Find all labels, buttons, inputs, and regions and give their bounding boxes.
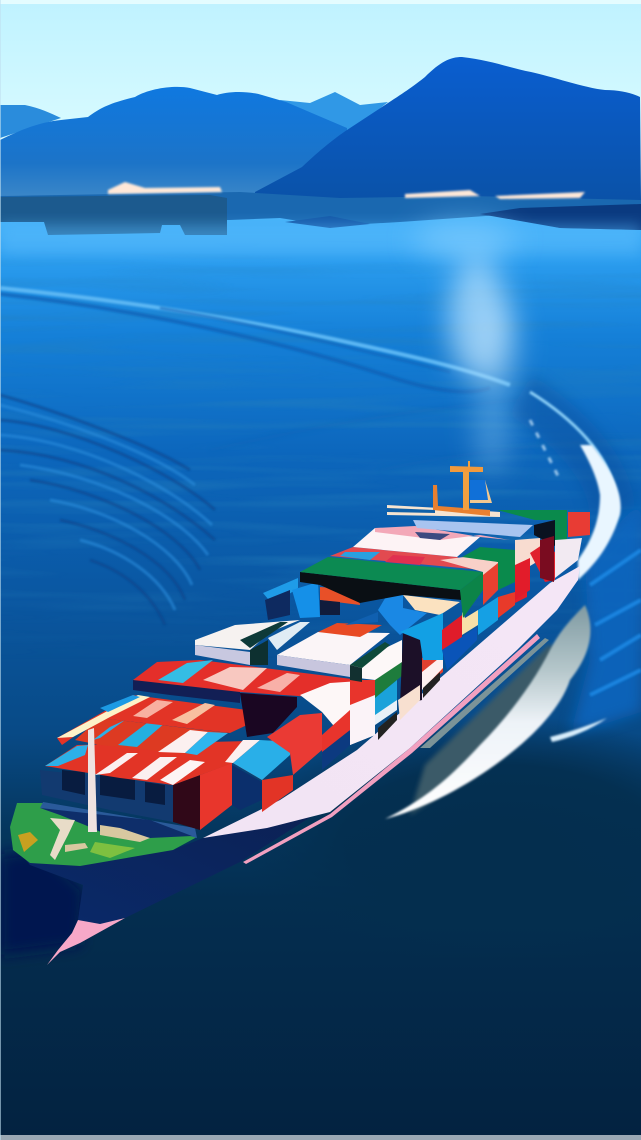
mountains: [0, 57, 641, 200]
mid-stack side containers: [322, 627, 443, 770]
brighter water along the right edge: [570, 500, 641, 735]
row A upper layer: [75, 718, 228, 755]
stern wake foam: [385, 445, 621, 819]
smoke plume: [415, 220, 518, 475]
red block right: [267, 713, 322, 775]
row C dark front: [133, 680, 240, 703]
blue containers at midship: [263, 563, 527, 670]
red block: [200, 763, 232, 830]
row A top: [45, 740, 292, 810]
white block 2 left: [195, 620, 310, 665]
container ship: [10, 461, 590, 965]
sky: [0, 0, 641, 200]
container front block: dark faces: [40, 770, 173, 822]
water surface streaks: [1, 270, 641, 568]
hull: navy bow: [13, 775, 345, 924]
hull: grey boot stripe: [420, 638, 549, 748]
dark shadow recess: [173, 775, 200, 830]
hull: pink waterline: [243, 634, 540, 864]
green aft container: [497, 510, 567, 547]
row B: [57, 695, 247, 745]
bow mast: [88, 728, 97, 832]
navy and red side stack: [262, 775, 293, 812]
shoreline land: [0, 182, 641, 235]
aft deck containers: [330, 520, 555, 605]
water highlights, ripples and wake: [0, 225, 641, 625]
red aft container: [568, 512, 590, 537]
right-edge swell highlights: [590, 550, 641, 695]
black cavity: [240, 693, 297, 737]
dark water near the ship: [0, 645, 641, 965]
green long container: [300, 557, 483, 618]
stern structure: [555, 538, 582, 578]
row C top: [133, 660, 375, 745]
dark windows on front face: [62, 770, 165, 805]
white block 2 right: [277, 623, 402, 682]
periwinkle deck: [413, 520, 533, 537]
superstructure and mast: [387, 461, 500, 517]
bulbous bow tip: [47, 918, 125, 965]
hull: white side: [203, 566, 580, 838]
bow deck: [10, 802, 197, 866]
